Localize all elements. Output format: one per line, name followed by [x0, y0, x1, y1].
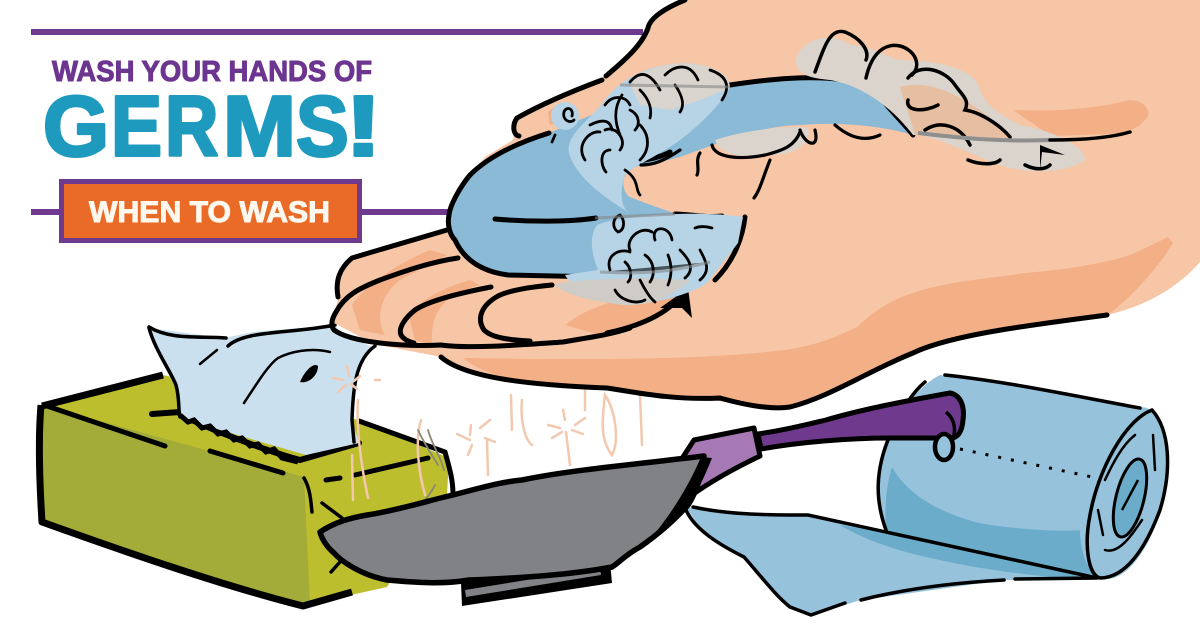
handle collar	[683, 428, 760, 495]
roll body	[878, 375, 1162, 578]
title: germs: S	[296, 80, 349, 174]
pan bowl	[320, 457, 701, 583]
hand outline	[332, 0, 1107, 408]
foam: lower	[555, 214, 743, 305]
illustration: frying pan	[320, 393, 963, 606]
illustration: hand	[332, 0, 1200, 408]
roll end	[1064, 398, 1184, 588]
title: germs: R	[165, 79, 218, 174]
soap cloth	[448, 78, 913, 283]
handle ring	[935, 412, 954, 460]
title: germs: !	[345, 79, 382, 174]
skin shading: finger tips	[352, 100, 1148, 345]
illustration: paper towel roll	[686, 375, 1184, 615]
foam: upper	[551, 63, 730, 212]
illustration: tissue box	[39, 375, 453, 606]
handle grip	[758, 393, 963, 449]
banner: when to wash	[62, 182, 360, 240]
title: germs: G	[43, 80, 109, 174]
pan base	[461, 562, 612, 606]
banner: when to wash: WHEN TO WASH	[89, 196, 330, 229]
illustration: tissue	[149, 325, 375, 462]
illustration: germ marks	[333, 366, 642, 505]
paper sheet	[686, 507, 1097, 615]
foam: fingers right	[796, 31, 1130, 171]
title: germs: M	[223, 80, 296, 174]
title: wash your hands of: WASH YOUR HANDS OF	[52, 56, 372, 88]
title: germs: E	[111, 80, 162, 174]
fingers under cloth	[641, 125, 880, 198]
skin shading: palm and wrist	[463, 237, 1173, 407]
title: germs	[43, 79, 382, 174]
